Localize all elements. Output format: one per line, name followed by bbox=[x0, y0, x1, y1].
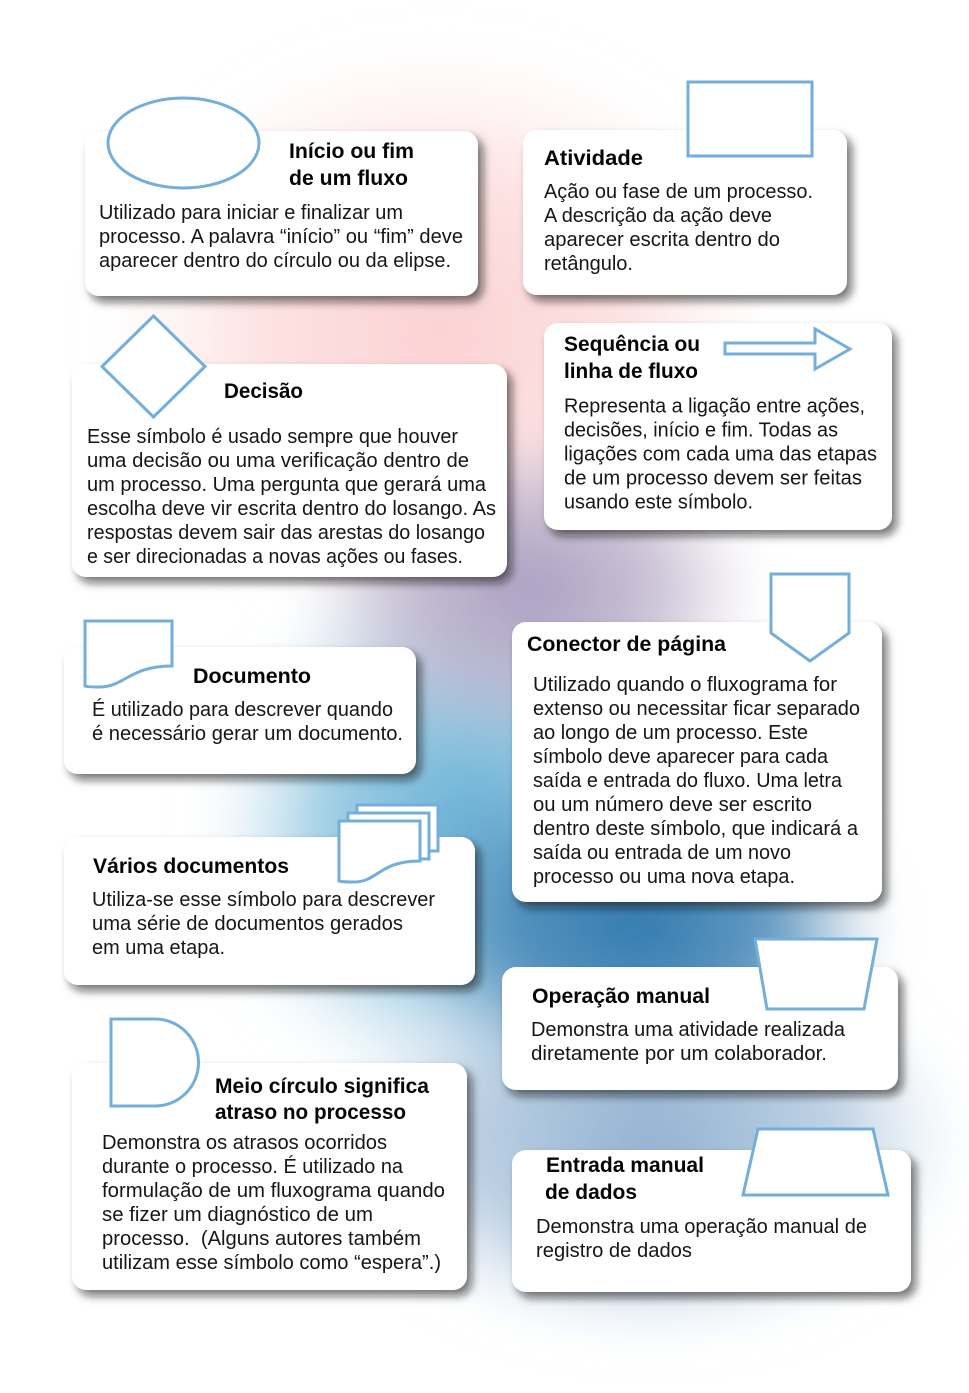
text: meio círculo: utilizam esse símbolo como “espera”.) bbox=[102, 1252, 441, 1274]
text: sequência: de um processo devem ser feitas bbox=[564, 468, 862, 490]
text: decisão: uma decisão ou uma verificação dentro de bbox=[87, 450, 469, 472]
heading: sequência: linha de fluxo bbox=[564, 360, 698, 383]
text: decisão: um processo. Uma pergunta que gerará uma bbox=[87, 474, 487, 496]
text: vários documentos: Utiliza-se esse símbolo para descrever bbox=[92, 889, 435, 911]
text: atividade: A descrição da ação deve bbox=[544, 205, 772, 227]
text: conector de página: saída e entrada do fluxo. Uma letra bbox=[533, 770, 843, 792]
heading: entrada manual: Entrada manual bbox=[546, 1154, 704, 1177]
text: decisão: respostas devem sair das arestas do losango bbox=[87, 522, 485, 544]
icon: ellipse bbox=[108, 98, 259, 188]
text: sequência: ligações com cada uma das etapas bbox=[564, 444, 877, 466]
text: decisão: e ser direcionadas a novas ações ou fases. bbox=[87, 546, 463, 568]
heading: início ou fim: Início ou fim bbox=[289, 140, 414, 163]
text: meio círculo: formulação de um fluxograma quando bbox=[102, 1180, 445, 1202]
icon: arrow bbox=[725, 329, 850, 369]
text: início ou fim bbox=[99, 202, 463, 272]
text: meio círculo bbox=[102, 1132, 445, 1274]
panel: entrada manual bbox=[512, 1129, 911, 1292]
panel: atividade bbox=[523, 82, 847, 295]
heading: início ou fim: de um fluxo bbox=[289, 167, 408, 190]
text: vários documentos: uma série de documentos gerados bbox=[92, 913, 403, 935]
heading: operação manual: Operação manual bbox=[532, 985, 710, 1008]
text: documento: É utilizado para descrever quando bbox=[92, 698, 393, 721]
heading: início ou fim bbox=[289, 140, 414, 190]
text: entrada manual: Demonstra uma operação manual de bbox=[536, 1216, 867, 1238]
icon: multiple documents bbox=[339, 805, 438, 882]
text: conector de página: processo ou uma nova etapa. bbox=[533, 866, 795, 888]
panel: documento bbox=[64, 621, 416, 774]
text: início ou fim: aparecer dentro do círculo ou da elipse. bbox=[99, 250, 451, 272]
heading: atividade: Atividade bbox=[544, 147, 643, 170]
text: documento: é necessário gerar um documento. bbox=[92, 723, 403, 745]
text: meio círculo: se fizer um diagnóstico de um bbox=[102, 1204, 373, 1226]
text: início ou fim: processo. A palavra “início” ou “fim” deve bbox=[99, 226, 463, 248]
text: atividade: aparecer escrita dentro do bbox=[544, 229, 780, 251]
heading: conector de página: Conector de página bbox=[527, 633, 726, 656]
heading: meio círculo: Meio círculo significa bbox=[215, 1075, 429, 1098]
heading: meio círculo: atraso no processo bbox=[215, 1101, 406, 1124]
panel: operação manual bbox=[502, 939, 898, 1090]
text: conector de página: símbolo deve aparecer para cada bbox=[533, 746, 829, 768]
text: meio círculo: Demonstra os atrasos ocorridos bbox=[102, 1132, 387, 1154]
icon: trapezoid bbox=[743, 1129, 888, 1195]
heading: sequência bbox=[564, 333, 700, 383]
heading: sequência: Sequência ou bbox=[564, 333, 700, 356]
text: meio círculo: durante o processo. É utilizado na bbox=[102, 1155, 404, 1178]
text: documento bbox=[92, 698, 403, 745]
icon: document bbox=[85, 621, 172, 687]
panel: vários documentos bbox=[64, 805, 475, 985]
heading: documento: Documento bbox=[193, 665, 311, 688]
text: conector de página bbox=[533, 674, 860, 888]
icon: inverted trapezoid bbox=[755, 939, 877, 1009]
text: meio círculo: processo. (Alguns autores também bbox=[102, 1228, 421, 1250]
text: decisão bbox=[87, 426, 496, 568]
panel: início ou fim bbox=[85, 98, 478, 296]
text: conector de página: Utilizado quando o fluxograma for bbox=[533, 674, 837, 696]
text: conector de página: ao longo de um processo. Este bbox=[533, 722, 808, 744]
text: sequência: Representa a ligação entre ações, bbox=[564, 396, 865, 418]
text: conector de página: ou um número deve ser escrito bbox=[533, 794, 812, 816]
heading: entrada manual: de dados bbox=[545, 1181, 637, 1204]
text: conector de página: dentro deste símbolo, que indicará a bbox=[533, 818, 859, 840]
heading: vários documentos: Vários documentos bbox=[93, 855, 289, 878]
text: atividade bbox=[544, 181, 813, 275]
text: operação manual: diretamente por um colaborador. bbox=[531, 1043, 827, 1065]
icon: off-page connector bbox=[771, 574, 849, 661]
text: conector de página: extenso ou necessitar ficar separado bbox=[533, 698, 860, 720]
text: atividade: retângulo. bbox=[544, 253, 633, 275]
text: decisão: escolha deve vir escrita dentro do losango. As bbox=[87, 498, 496, 520]
text: sequência: usando este símbolo. bbox=[564, 492, 753, 514]
panel: conector de página bbox=[512, 574, 882, 902]
heading: meio círculo bbox=[215, 1075, 429, 1124]
heading: decisão: Decisão bbox=[224, 380, 303, 403]
text: vários documentos bbox=[92, 889, 435, 959]
heading: entrada manual bbox=[545, 1154, 704, 1204]
text: operação manual: Demonstra uma atividade realizada bbox=[531, 1019, 846, 1041]
text: conector de página: saída ou entrada de um novo bbox=[533, 842, 791, 864]
panel: meio círculo bbox=[72, 1019, 467, 1290]
text: operação manual bbox=[531, 1019, 846, 1065]
text: vários documentos: em uma etapa. bbox=[92, 937, 225, 959]
icon: diamond bbox=[102, 316, 205, 417]
text: entrada manual: registro de dados bbox=[536, 1240, 692, 1262]
text: início ou fim: Utilizado para iniciar e finalizar um bbox=[99, 202, 403, 224]
text: atividade: Ação ou fase de um processo. bbox=[544, 181, 813, 203]
panel: decisão bbox=[72, 316, 507, 577]
text: sequência: decisões, início e fim. Todas as bbox=[564, 420, 838, 442]
text: sequência bbox=[564, 396, 877, 514]
text: decisão: Esse símbolo é usado sempre que houver bbox=[87, 426, 458, 448]
panel: sequência bbox=[544, 323, 892, 530]
icon: rectangle bbox=[688, 82, 812, 156]
icon: half circle bbox=[111, 1019, 198, 1106]
text: entrada manual bbox=[536, 1216, 867, 1262]
